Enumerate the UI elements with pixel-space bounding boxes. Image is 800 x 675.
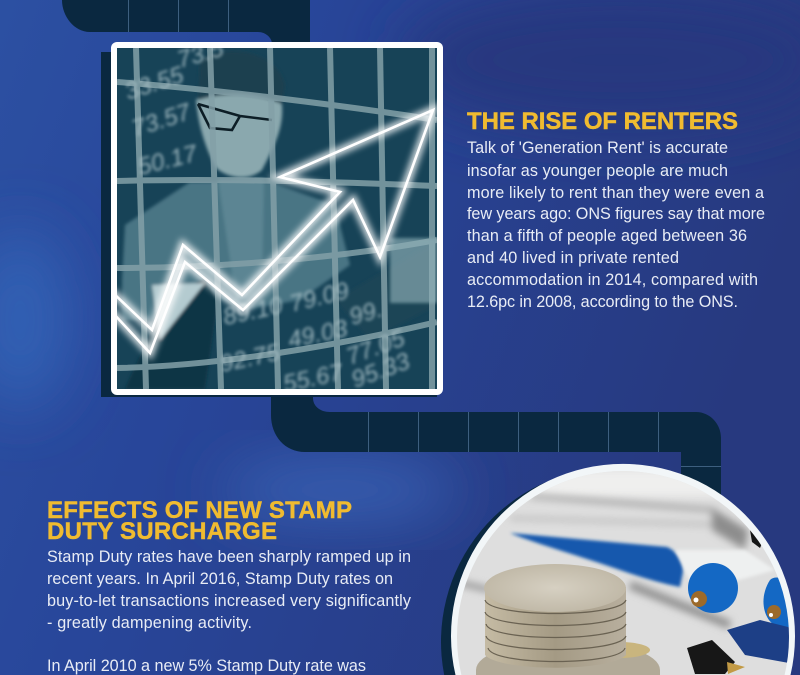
rising arrow	[112, 110, 433, 353]
text block: the rise of renters	[467, 139, 765, 311]
ticker numbers	[122, 35, 414, 398]
circle shadow	[441, 468, 789, 675]
ticker numbers: 55.67	[281, 359, 347, 398]
circular photo: coins and pens	[450, 464, 800, 675]
heading: effects of new stamp duty surcharge	[47, 497, 352, 545]
ticker numbers: 49.03	[286, 315, 351, 354]
ticker numbers: 73.57	[129, 98, 196, 143]
coin stack	[484, 564, 626, 668]
top connector band	[62, 0, 310, 44]
ticker numbers: 92.75	[218, 339, 283, 378]
blue pen	[510, 533, 683, 587]
ticker numbers: 33.55	[122, 61, 188, 106]
ticker numbers: 99.	[346, 296, 386, 331]
text block: stamp duty: buy-to-let transactions increased very significantly	[47, 592, 412, 610]
heading: effects of new stamp duty surcharge: DUTY SURCHARGE	[47, 518, 277, 545]
photo shadow panel	[101, 52, 437, 397]
text block: stamp duty	[47, 548, 412, 675]
heading: the rise of renters: THE RISE OF RENTERS	[467, 108, 738, 135]
glasses	[198, 104, 272, 130]
photo: analyst with rising arrow	[111, 35, 443, 398]
text block: the rise of renters: Talk of 'Generation Rent' is accurate	[467, 139, 728, 157]
grid lines	[117, 48, 437, 389]
text block: the rise of renters: more likely to rent than they were even a	[467, 184, 764, 202]
text block: the rise of renters: 12.6pc in 2008, according to the ONS.	[467, 293, 738, 311]
ticker numbers: 50.17	[135, 140, 201, 181]
lower large coin	[476, 654, 660, 675]
hexagon patch	[390, 238, 437, 303]
text block: stamp duty: recent years. In April 2016, Stamp Duty rates on	[47, 570, 393, 588]
pen caps	[687, 563, 800, 674]
ticker numbers: 95.33	[348, 348, 414, 394]
text block: the rise of renters: few years ago: ONS figures say that more	[467, 205, 765, 223]
text block: the rise of renters: accommodation in 2014, compared with	[467, 271, 758, 289]
ticker numbers: 73.5	[174, 35, 227, 74]
lower connector band	[271, 390, 721, 495]
ticker numbers: 89.10	[221, 292, 286, 331]
paper stripes	[460, 496, 748, 625]
text block: stamp duty: Stamp Duty rates have been sharply ramped up in	[47, 548, 411, 566]
heading: effects of new stamp duty surcharge: EFFECTS OF NEW STAMP	[47, 497, 352, 524]
pen tip dark mark	[750, 530, 762, 548]
text block: the rise of renters: and 40 lived in private rented	[467, 249, 679, 267]
text block: the rise of renters: than a fifth of people aged between 36	[467, 227, 747, 245]
ticker numbers: 77.05	[343, 325, 409, 371]
white pen barrel	[674, 548, 772, 580]
ticker numbers: 79.09	[287, 277, 352, 318]
text block: stamp duty: In April 2010 a new 5% Stamp Duty rate was	[47, 657, 366, 675]
text block: stamp duty: - greatly dampening activity.	[47, 614, 252, 632]
figure of the man	[120, 54, 351, 389]
text block: the rise of renters: insofar as younger people are much	[467, 162, 728, 180]
